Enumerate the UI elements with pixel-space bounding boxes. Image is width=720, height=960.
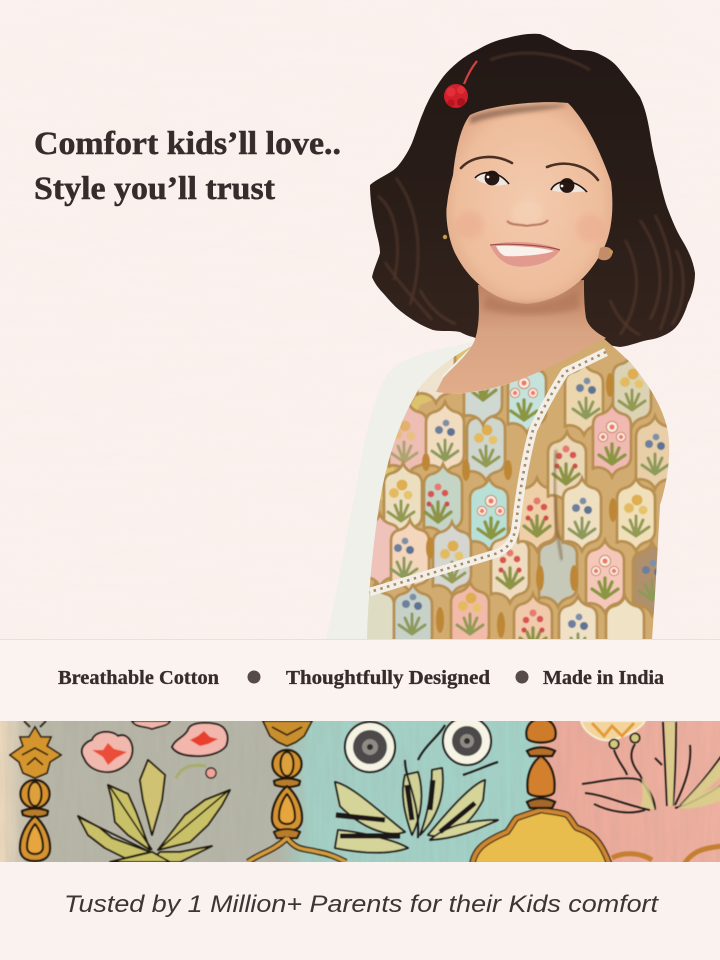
- lace trim: [370, 352, 606, 592]
- tagline: Tusted by 1 Million+ Parents for their Kids comfort: [64, 891, 659, 918]
- kurta: [367, 338, 670, 639]
- ears and earrings: [443, 235, 613, 260]
- sleeve fold shadow: [554, 450, 562, 560]
- hair highlights: [378, 53, 683, 335]
- left eye: [475, 171, 509, 186]
- hair clip flower: [444, 61, 477, 108]
- bud on stem: [176, 765, 216, 778]
- pink plant leaves: [640, 722, 720, 810]
- illustration: girl in printed kurta: [326, 34, 695, 669]
- leaf veins: [80, 787, 228, 852]
- headline: [34, 126, 341, 207]
- white flower left: [345, 722, 395, 772]
- column 3: [526, 718, 556, 808]
- pink flower right: [172, 723, 228, 756]
- headline: Style you’ll trust: [34, 171, 275, 207]
- dupatta: [326, 342, 474, 639]
- mint plant stems and bars: [336, 725, 498, 838]
- feature strip: Breathable Cotton: [58, 668, 219, 689]
- left shoulder yoke: [378, 345, 470, 500]
- yellow-green leaves: [78, 760, 230, 862]
- feature strip: Thoughtfully Designed: [286, 668, 490, 689]
- mint plant: [335, 768, 498, 853]
- eyebrows: [461, 157, 598, 180]
- fringe wisps: [470, 105, 568, 124]
- cheek blush: [456, 211, 604, 242]
- hair: [370, 34, 695, 347]
- chin shadow: [482, 290, 580, 315]
- gold joints: [422, 373, 617, 638]
- paper texture: [0, 0, 720, 640]
- smile: [490, 242, 560, 267]
- feature strip: Made in India: [543, 668, 664, 689]
- pink flower left: [82, 732, 132, 772]
- bottom strip: [0, 862, 720, 960]
- headline: Comfort kids’ll love..: [34, 126, 341, 162]
- top flower: [132, 721, 170, 729]
- fabric print band: [0, 717, 720, 866]
- column 1: [10, 721, 61, 861]
- nose: [507, 201, 548, 226]
- column 2: [248, 721, 346, 862]
- orange flower top: [581, 721, 645, 749]
- pink plant: [582, 722, 720, 812]
- weave texture: [386, 721, 718, 862]
- feature strip: [0, 639, 720, 721]
- face: [446, 102, 612, 304]
- bullet: [248, 670, 260, 684]
- right eye: [551, 178, 587, 193]
- neck: [436, 280, 606, 393]
- yellow arch: [472, 810, 610, 866]
- bullet: [516, 670, 528, 684]
- arch edge right: [612, 846, 720, 866]
- print tiles: [416, 356, 457, 406]
- white flower right: [443, 717, 491, 765]
